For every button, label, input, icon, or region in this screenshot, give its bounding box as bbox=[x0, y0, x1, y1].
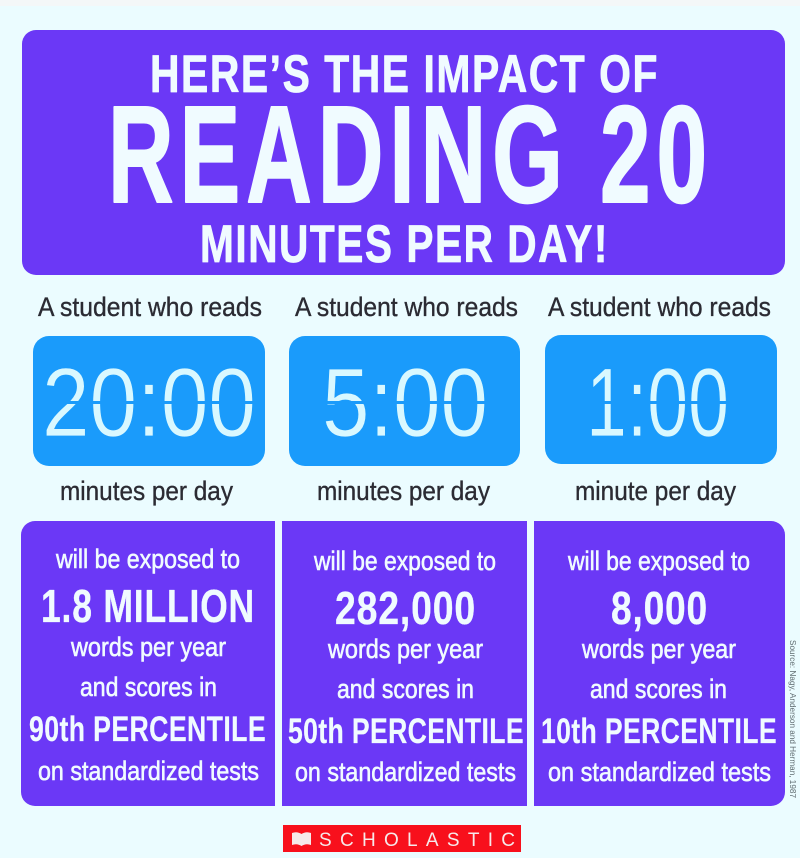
panel: 5 minutes result bbox=[282, 521, 527, 806]
exposure text: will be exposed to bbox=[313, 546, 496, 576]
scores text: and scores in bbox=[590, 674, 727, 704]
words per year: words per year bbox=[327, 634, 483, 664]
clock: 20:00: 20:00 bbox=[42, 348, 256, 457]
exposure text: will be exposed to bbox=[55, 544, 240, 574]
tests text: on standardized tests bbox=[38, 756, 259, 786]
column 3 intro text: A student who reads bbox=[548, 292, 771, 322]
scores text: and scores in bbox=[337, 674, 474, 704]
title line 3: MINUTES PER DAY! bbox=[200, 215, 609, 274]
icon: open book bbox=[292, 832, 311, 846]
logo: Scholastic bbox=[283, 825, 521, 852]
column 1 unit text: minutes per day bbox=[60, 476, 233, 506]
title banner bbox=[22, 30, 785, 275]
column 2 intro text: A student who reads bbox=[295, 292, 518, 322]
word count: 8,000 bbox=[611, 582, 708, 634]
percentile: 90th PERCENTILE bbox=[29, 710, 266, 749]
words per year: words per year bbox=[70, 632, 226, 662]
panel: 1 minute result bbox=[534, 521, 785, 806]
clock: 1:00 bbox=[545, 335, 777, 464]
scores text: and scores in bbox=[80, 672, 217, 702]
source note: Source: Nagy, Anderson and Herman, 1987 bbox=[788, 640, 797, 799]
clock: 5:00 bbox=[289, 336, 520, 466]
words per year: words per year bbox=[581, 634, 736, 664]
tests text: on standardized tests bbox=[548, 757, 771, 787]
title line 1: HERE’S THE IMPACT OF bbox=[150, 45, 659, 104]
word count: 282,000 bbox=[335, 582, 476, 634]
percentile: 50th PERCENTILE bbox=[288, 712, 524, 751]
column 3 unit text: minute per day bbox=[575, 476, 736, 506]
clock: 1:00: 1:00 bbox=[586, 348, 729, 457]
column 2 unit text: minutes per day bbox=[317, 476, 490, 506]
clock: 5:00: 5:00 bbox=[322, 348, 488, 457]
panel: 20 minutes result bbox=[21, 521, 275, 806]
tests text: on standardized tests bbox=[295, 757, 516, 787]
logo: Scholastic: SCHOLASTIC bbox=[319, 830, 515, 851]
column 1 intro text: A student who reads bbox=[38, 292, 262, 322]
word count: 1.8 MILLION bbox=[41, 580, 255, 632]
exposure text: will be exposed to bbox=[567, 546, 750, 576]
